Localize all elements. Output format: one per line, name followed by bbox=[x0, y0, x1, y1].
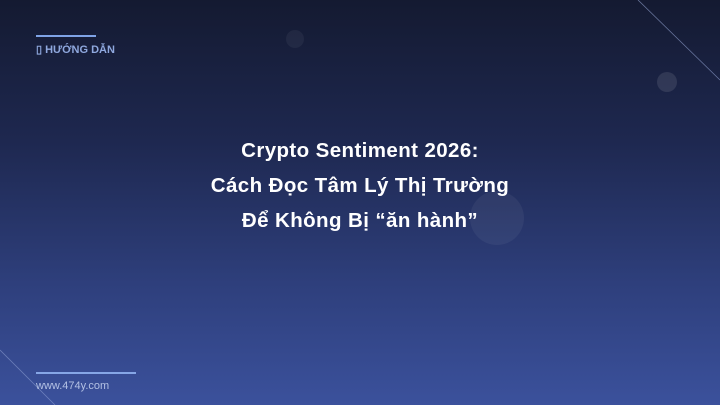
title bbox=[211, 139, 509, 232]
title: Cách Đọc Tâm Lý Thị Trường bbox=[211, 174, 509, 197]
label: guide tag: ▯ HƯỚNG DẪN bbox=[36, 44, 115, 56]
footer: website: www.474y.com bbox=[36, 380, 109, 392]
title: Để Không Bị “ăn hành” bbox=[242, 209, 478, 232]
title: Crypto Sentiment 2026: bbox=[241, 139, 479, 162]
